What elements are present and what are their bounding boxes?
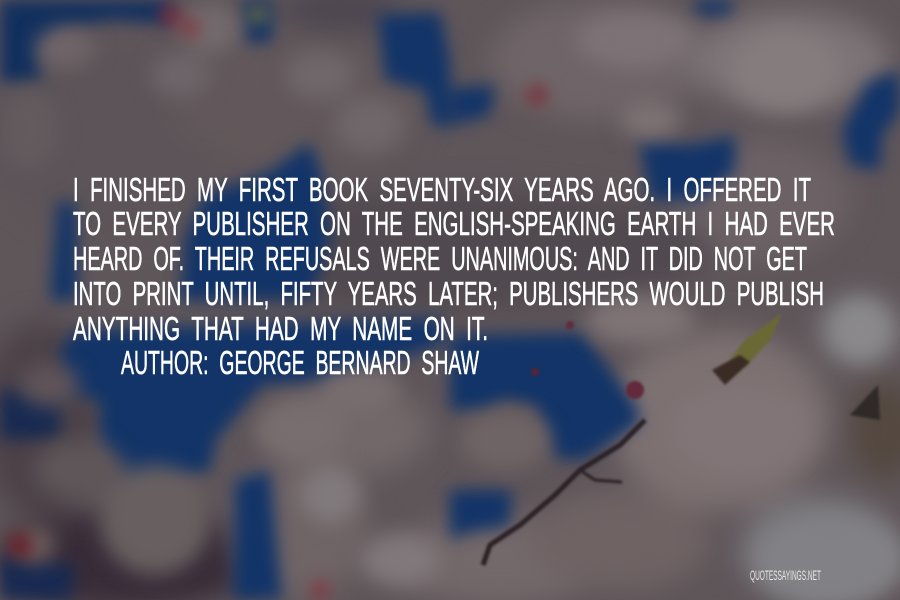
author attribution: AUTHOR: GEORGE BERNARD SHAW <box>121 344 480 381</box>
text: QUOTESSAYINGS.NET <box>750 568 821 583</box>
branch and leaf <box>483 313 880 565</box>
quote text <box>73 171 835 347</box>
red buds <box>8 5 547 598</box>
line 5: ANYTHING THAT HAD MY NAME ON IT. <box>73 310 488 347</box>
